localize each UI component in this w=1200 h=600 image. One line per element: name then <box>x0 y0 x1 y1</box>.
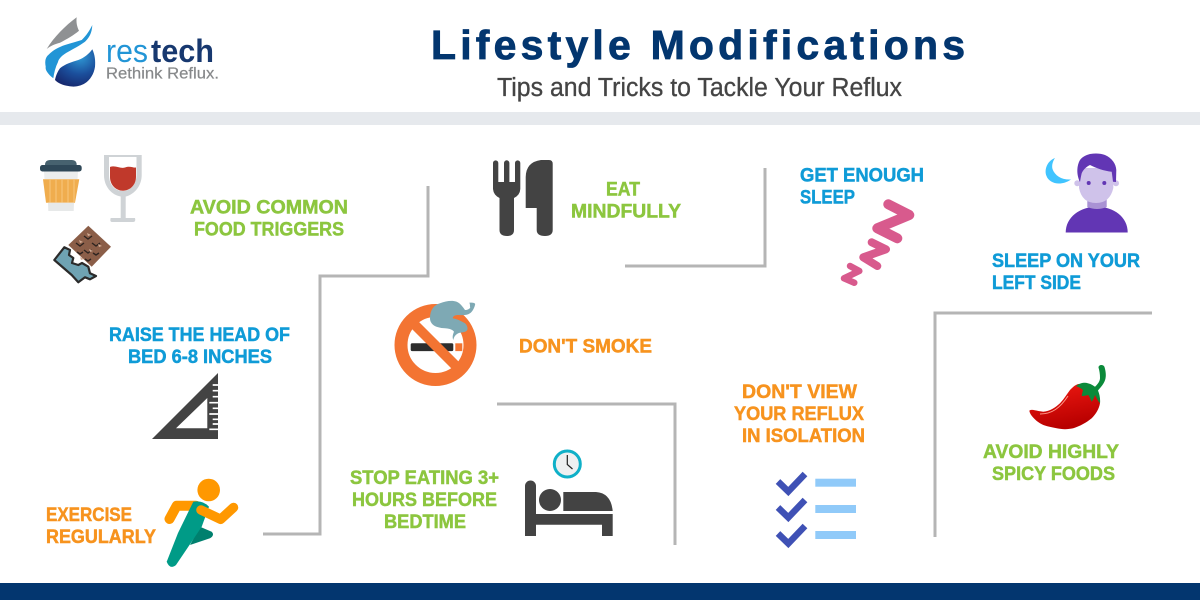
text: get enough sleep: GET ENOUGH <box>800 164 924 186</box>
header divider band <box>0 112 1200 125</box>
text: avoid spicy foods: SPICY FOODS <box>992 463 1115 485</box>
logo: res <box>106 33 148 69</box>
text: don't view <box>734 381 865 447</box>
text: avoid spicy foods: AVOID HIGHLY <box>983 441 1119 463</box>
icon: set square <box>152 373 218 439</box>
footer band <box>0 583 1200 600</box>
icon: runner <box>167 479 234 567</box>
text: stop eating <box>350 467 499 533</box>
text: raise the head: BED 6-8 INCHES <box>128 346 272 368</box>
text: get enough sleep <box>800 164 924 208</box>
icon: bed <box>525 481 613 536</box>
text: eat mindfully: MINDFULLY <box>571 200 681 222</box>
text: sleep on left side <box>992 250 1140 294</box>
text: avoid common food triggers <box>190 196 348 240</box>
text: exercise regularly <box>46 504 156 548</box>
icon: checklist <box>778 474 856 544</box>
title: Lifestyle Modifications <box>431 22 965 68</box>
icon: wine glass <box>104 155 142 222</box>
text: get enough sleep: SLEEP <box>800 186 855 208</box>
icon: coffee cup <box>40 160 82 211</box>
text: stop eating: HOURS BEFORE <box>352 489 497 511</box>
logo: tech <box>151 33 214 69</box>
icon: chili pepper <box>1029 365 1106 429</box>
connector line 3 <box>497 404 675 545</box>
connector line 4 <box>935 313 1152 537</box>
text: avoid common food triggers: AVOID COMMON <box>190 196 348 218</box>
connector line 2 <box>625 168 765 266</box>
text: exercise regularly: REGULARLY <box>46 526 156 548</box>
text: sleep on left side: LEFT SIDE <box>992 272 1081 294</box>
text: don't view: YOUR REFLUX <box>734 403 864 425</box>
text: avoid spicy foods <box>983 441 1119 485</box>
text: avoid common food triggers: FOOD TRIGGERS <box>194 218 344 240</box>
text: stop eating: BEDTIME <box>384 511 466 533</box>
icon: chocolate bar <box>54 226 111 282</box>
icon: fork and knife <box>493 160 553 236</box>
icon: clock <box>554 451 580 477</box>
logo: Rethink Reflux. <box>106 65 219 82</box>
text: stop eating: STOP EATING 3+ <box>350 467 499 489</box>
icon: no smoking <box>401 301 475 380</box>
subtitle: Tips and Tricks to Tackle Your Reflux <box>497 74 902 102</box>
icon: sleeping person with moon <box>1046 153 1128 232</box>
text: raise the head <box>109 324 290 368</box>
text: sleep on left side: SLEEP ON YOUR <box>992 250 1140 272</box>
icon: zzz <box>844 204 909 283</box>
text: eat mindfully <box>571 178 681 222</box>
logo <box>45 17 219 87</box>
text: exercise regularly: EXERCISE <box>46 504 132 526</box>
connector line 1 <box>263 186 428 534</box>
text: don't smoke: DON'T SMOKE <box>519 336 652 358</box>
text: eat mindfully: EAT <box>606 178 640 200</box>
text: raise the head: RAISE THE HEAD OF <box>109 324 290 346</box>
text: don't view: IN ISOLATION <box>742 425 865 447</box>
text: don't view: DON'T VIEW <box>742 381 858 403</box>
